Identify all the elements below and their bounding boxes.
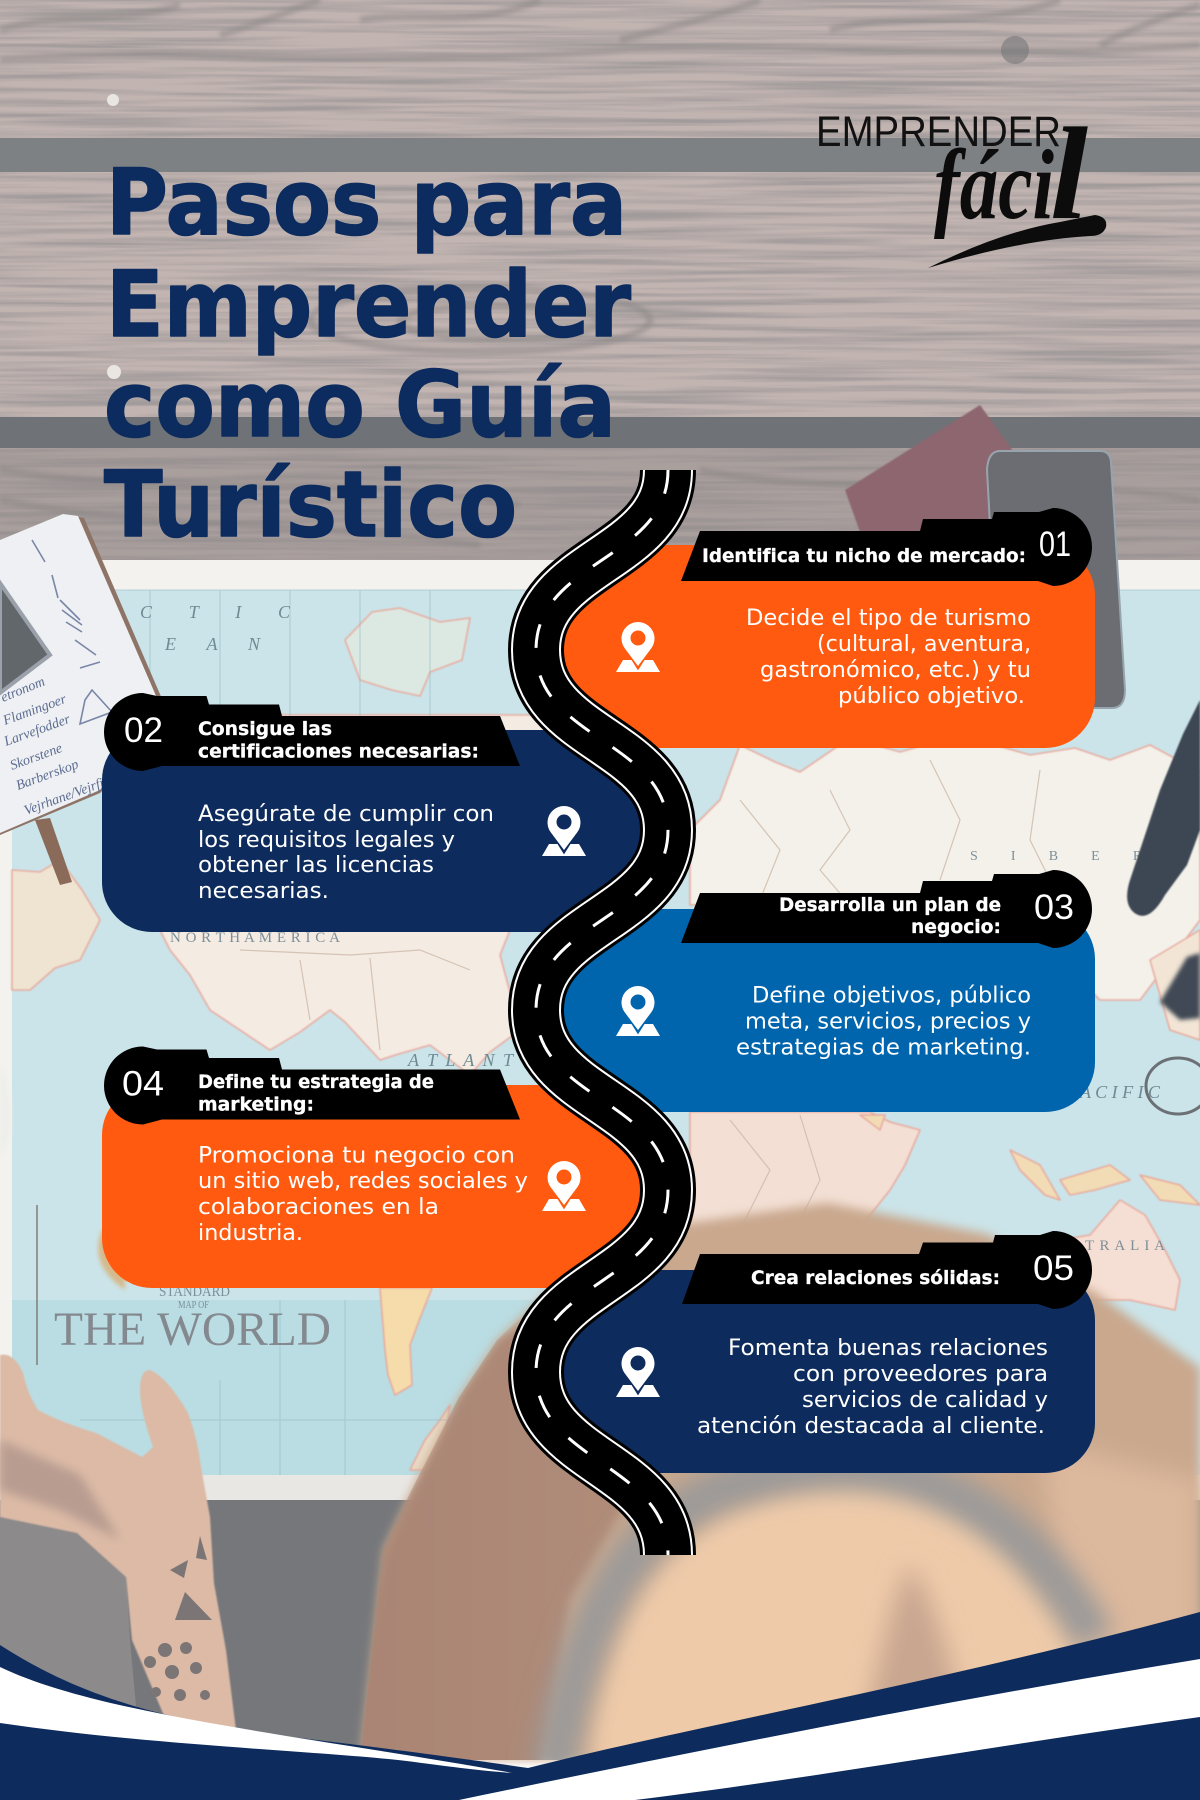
step 03 header banner: Desarrolla un plan de (779, 894, 1001, 916)
step 02 text (198, 802, 494, 904)
country borders (240, 760, 1060, 1240)
step 02 text: obtener las licencias (198, 853, 434, 878)
step 01 header banner (681, 508, 1092, 586)
map labels (54, 602, 1180, 1356)
map labels: STANDARD (159, 1284, 230, 1300)
step 05 text: Fomenta buenas relaciones (728, 1336, 1048, 1361)
winding road (536, 470, 668, 1555)
step 01 text: gastronómico, etc.) y tu (760, 658, 1031, 683)
title: como Guía (104, 353, 616, 458)
map labels: T R A L I A (1085, 1238, 1165, 1254)
step 05 text: servicios de calidad y (802, 1388, 1048, 1413)
title: Emprender (106, 253, 631, 358)
step 03 header banner: negocio: (911, 916, 1001, 938)
background photo: wood table (0, 0, 1200, 570)
step 03 text: meta, servicios, precios y (745, 1010, 1031, 1034)
background photo: notebook with sketches: Skorstene (8, 741, 65, 774)
background photo: cup and coin (0, 1060, 125, 1290)
map labels: N O R T H A M E R I C A (170, 930, 340, 946)
title (104, 151, 631, 558)
icon: map pin (616, 622, 660, 672)
step 04 text: industria. (198, 1221, 303, 1246)
step 03 text: estrategias de marketing. (736, 1036, 1031, 1060)
background photo: hand with tattoo (0, 1355, 236, 1750)
step 02 text: Asegúrate de cumplir con (198, 802, 494, 827)
background photo: notebook with sketches: Vejrhane/Vejrfisk (22, 772, 118, 819)
step 05 text: con proveedores para (793, 1362, 1048, 1387)
panel: step 04 card (102, 1085, 640, 1288)
panel: step 03 card (564, 909, 1095, 1112)
icon: map pin (616, 1347, 660, 1397)
step 04 header banner: 04 (122, 1064, 164, 1104)
background photo: world map (0, 560, 1200, 1750)
step 04 text: colaboraciones en la (198, 1195, 439, 1220)
map labels: A C I F I C (1079, 1082, 1161, 1102)
step 03 header banner (681, 870, 1092, 948)
step 02 text: los requisitos legales y (198, 828, 455, 853)
step 04 header banner: marketing: (198, 1094, 314, 1116)
logo: Emprender fácil (816, 100, 1106, 268)
white ribbon left (0, 1667, 513, 1773)
step 04 header banner: Define tu estrategia de (198, 1071, 434, 1093)
background photo: notebook with sketches (0, 514, 172, 885)
background photo: phone (987, 451, 1125, 708)
map labels: THE WORLD (54, 1303, 331, 1356)
map labels: E A N (164, 634, 261, 654)
step 05 header banner: 05 (1033, 1249, 1074, 1288)
background photo: passport (845, 405, 1013, 560)
background photo: camera and cable (1146, 953, 1200, 1114)
step 05 text: atención destacada al cliente. (697, 1414, 1045, 1439)
step 04 text: un sitio web, redes sociales y (198, 1169, 528, 1194)
logo: Emprender fácil: fáci (934, 129, 1054, 240)
panel: step 01 card (564, 545, 1095, 748)
step 01 text: público objetivo. (838, 684, 1025, 709)
map labels: C T I C (140, 602, 291, 622)
step 04 header banner (104, 1046, 520, 1124)
step 02 header banner: certificaciones necesarias: (198, 740, 479, 762)
title: Turístico (104, 453, 517, 558)
continents (345, 608, 470, 696)
background photo: notebook with sketches: Larvefodder (1, 712, 73, 750)
step 02 header banner: Consigue las (198, 718, 332, 740)
background photo: notebook with sketches: Flamingoer (0, 692, 69, 729)
bottom wave banner (0, 1612, 1200, 1800)
icon: map pin (616, 986, 660, 1036)
step 05 header banner: Crea relaciones sólidas: (751, 1267, 1000, 1289)
step 01 text: (cultural, aventura, (817, 632, 1031, 657)
panel: step 02 card (102, 730, 640, 932)
step 04 text (198, 1144, 528, 1246)
step 05 header banner (682, 1231, 1092, 1309)
background photo: watch strap (1127, 700, 1200, 916)
logo: Emprender fácil: EMPRENDER (816, 108, 1061, 156)
step 03 text: Define objetivos, público (752, 984, 1031, 1008)
step 01 text (746, 606, 1031, 709)
logo: Emprender fácil: l (1050, 100, 1088, 247)
map labels: MAP OF (178, 1300, 209, 1311)
background photo: hat (340, 1203, 1200, 1780)
step 02 header banner: 02 (124, 711, 163, 750)
background photo: notebook with sketches: Barberskop (14, 757, 81, 794)
step 03 text (736, 984, 1031, 1060)
white ribbon right (459, 1659, 1200, 1800)
step 04 text: Promociona tu negocio con (198, 1144, 515, 1168)
step 02 text: necesarias. (198, 879, 329, 904)
title: Pasos para (106, 151, 627, 256)
panel: step 05 card (564, 1270, 1095, 1473)
step 03 header banner: 03 (1034, 888, 1074, 927)
step 01 header banner: Identifica tu nicho de mercado: (702, 545, 1026, 567)
step 01 header banner: 01 (1039, 525, 1071, 564)
icon: map pin (542, 806, 586, 856)
background photo: notebook with sketches: etronom (0, 675, 47, 706)
graticule (12, 590, 1200, 1475)
step 01 text: Decide el tipo de turismo (746, 606, 1031, 631)
map labels: S I B E R I (970, 849, 1180, 864)
step 05 text (697, 1336, 1048, 1439)
map labels: A T L A N T (407, 1050, 515, 1070)
icon: map pin (542, 1161, 586, 1211)
step 02 header banner (104, 693, 520, 771)
